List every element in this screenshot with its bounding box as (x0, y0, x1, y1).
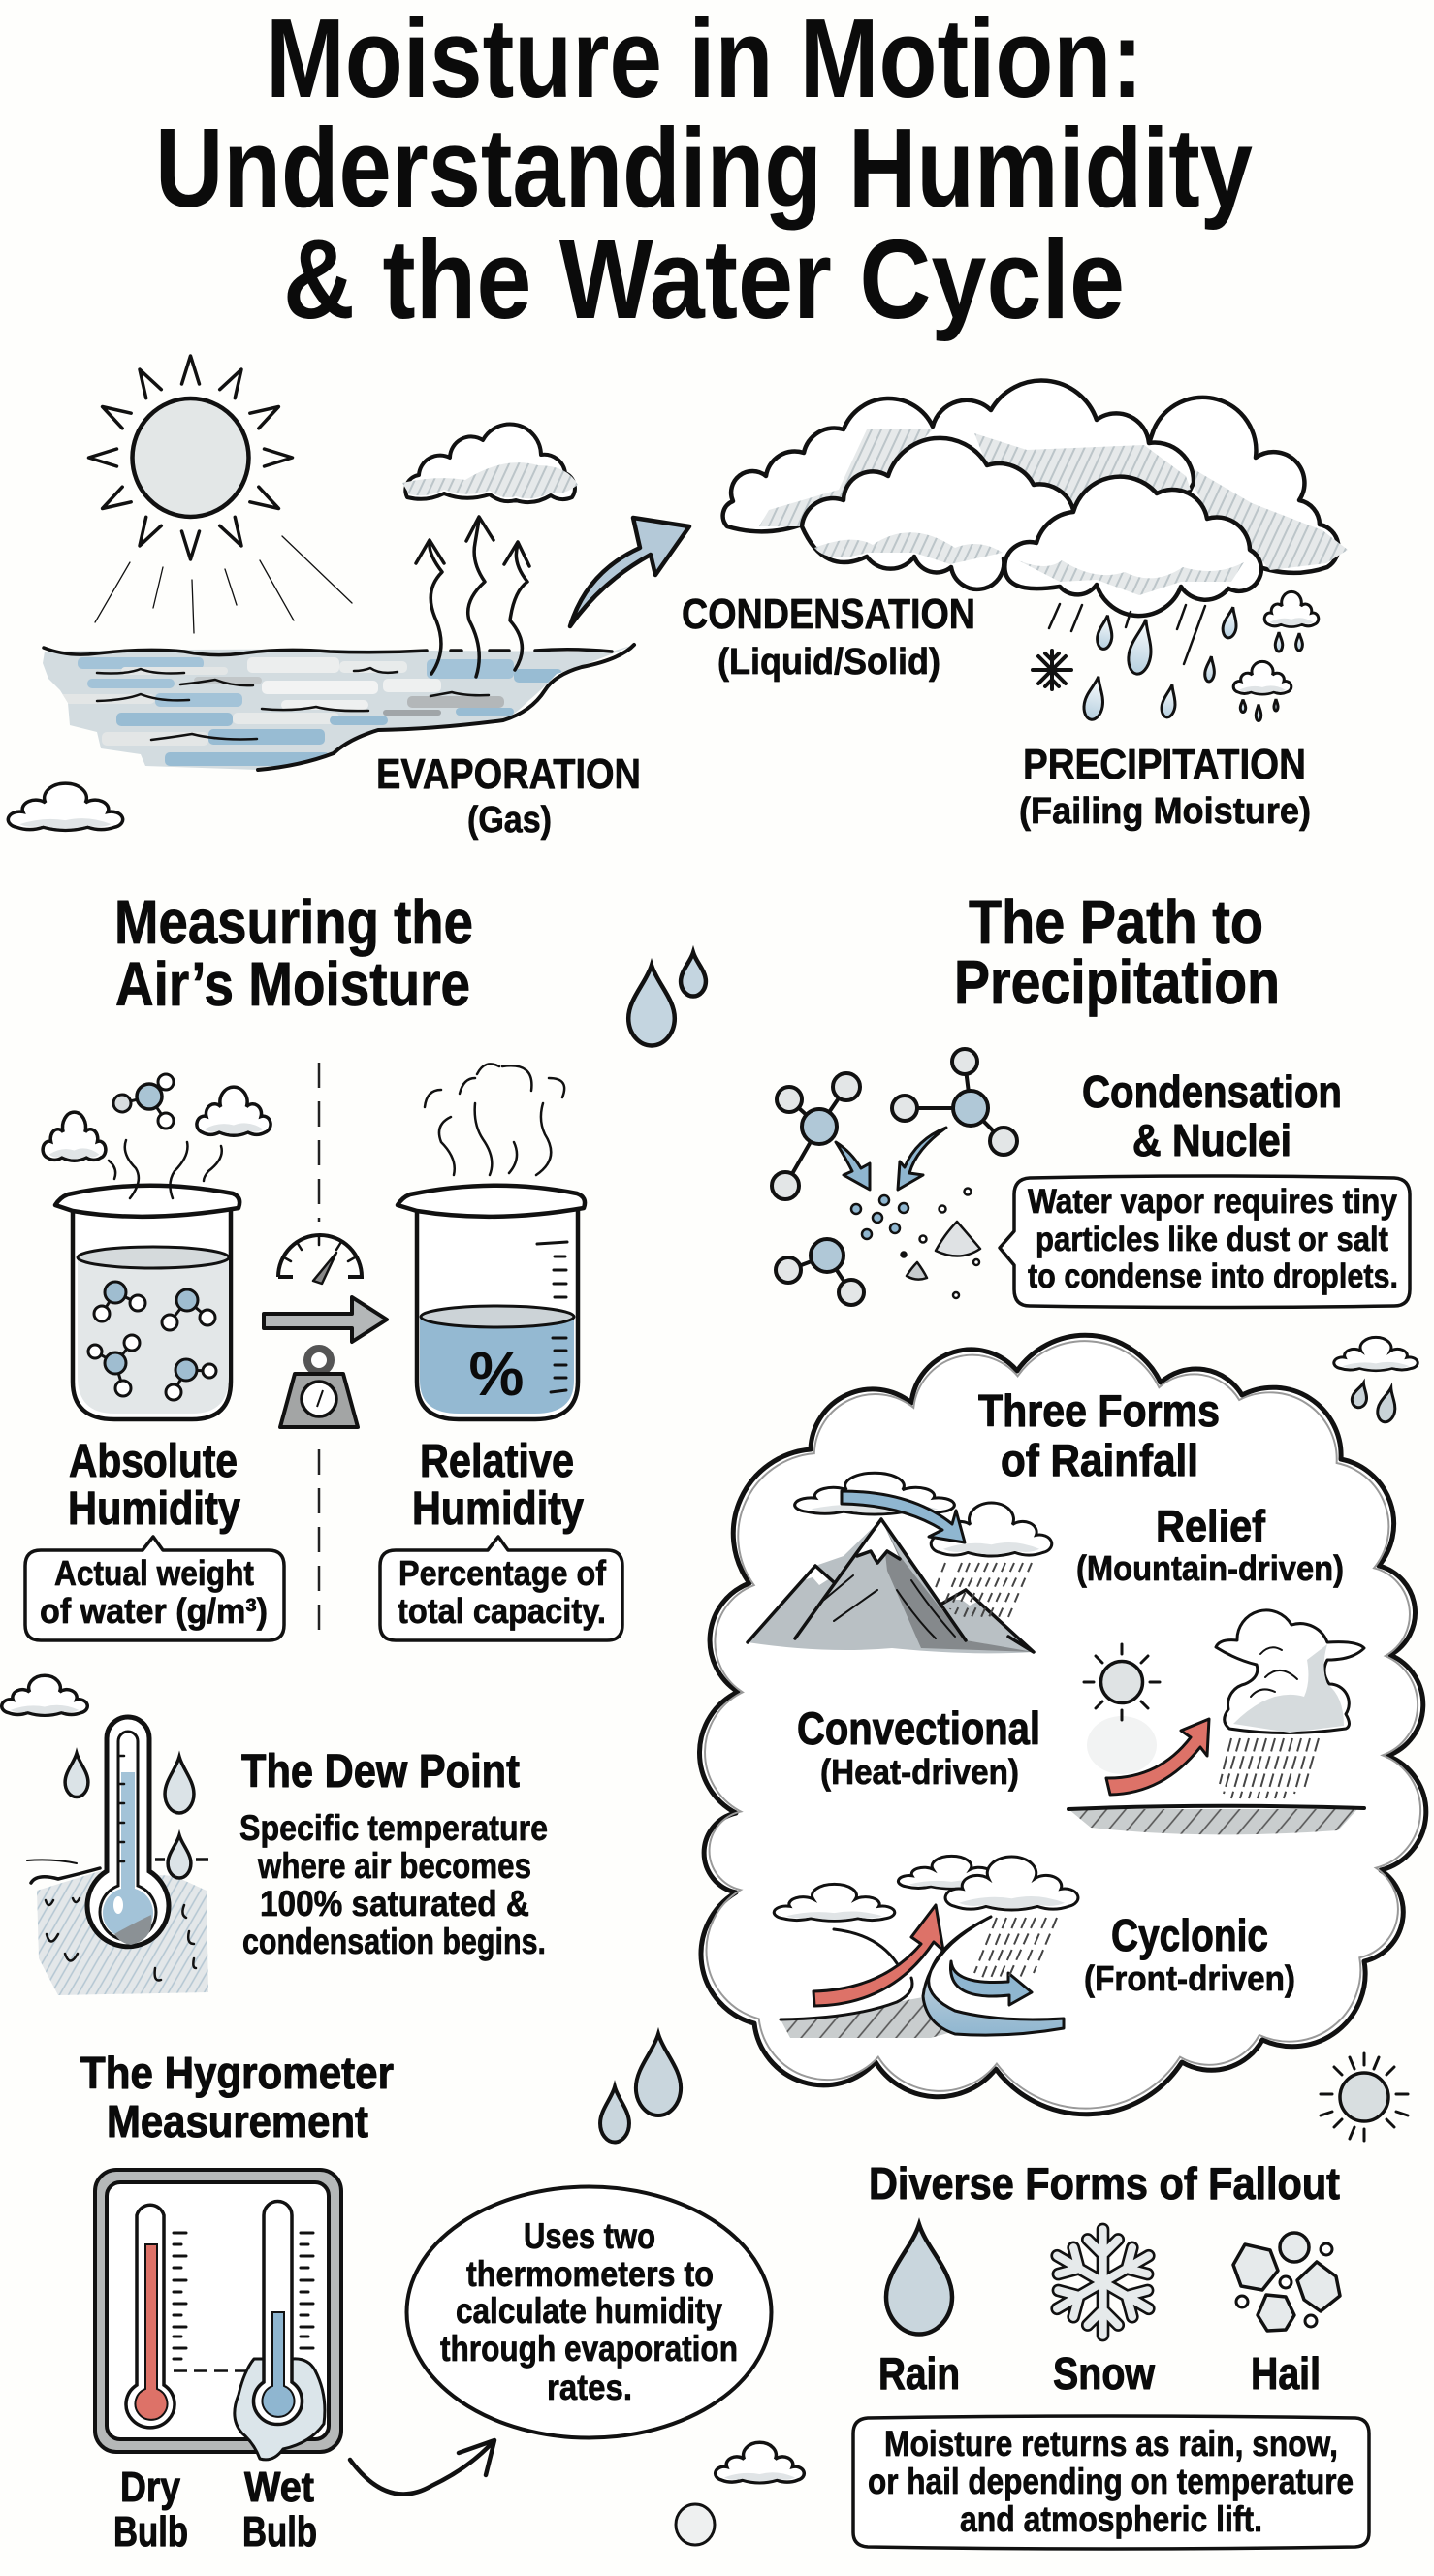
heading: path to precipitation (954, 887, 1280, 1017)
label: absolute humidity (68, 1436, 240, 1535)
icon: relative humidity beaker (398, 1064, 585, 1419)
icon: thermometer (87, 1717, 169, 1947)
heading: path to precipitation: The Path to (969, 887, 1263, 957)
panel: dew point (2, 1675, 548, 1995)
divider (318, 1063, 320, 1640)
icon: sun bottom right (1321, 2053, 1408, 2141)
icon: snowflake (1049, 2229, 1157, 2336)
heading: three forms (978, 1385, 1220, 1485)
icon: relative humidity beaker: % (469, 1339, 524, 1409)
icon: decorative cloud (8, 783, 123, 830)
title (155, 0, 1253, 342)
heading: measuring: Air’s Moisture (115, 949, 470, 1019)
label: absolute humidity: Absolute (69, 1436, 238, 1487)
callout: hygrometer explanation: thermometers to (466, 2254, 714, 2294)
heading: three forms: of Rainfall (1001, 1435, 1198, 1485)
label: condensation (682, 590, 975, 683)
label: convectional: Convectional (797, 1702, 1040, 1754)
label: condensation: CONDENSATION (682, 590, 975, 638)
text: dew point: condensation begins. (242, 1922, 546, 1961)
label: dry bulb: Dry (120, 2464, 180, 2511)
heading: hygrometer (80, 2048, 394, 2147)
icon: relief rainfall (748, 1473, 1052, 1653)
icon: sun (89, 356, 352, 633)
label: relative humidity: Humidity (412, 1483, 584, 1535)
arrow: rising vapour (416, 517, 529, 677)
label: wet bulb: Wet (244, 2464, 314, 2511)
label: condensation: (Liquid/Solid) (717, 642, 940, 683)
title: Understanding Humidity (155, 105, 1253, 231)
label: cyclonic: Cyclonic (1111, 1910, 1268, 1960)
icon: cyclonic rainfall (774, 1856, 1078, 2038)
label: relief (1076, 1501, 1344, 1588)
icon: gauge (278, 1235, 362, 1284)
icon: absolute humidity beaker (55, 1186, 239, 1419)
label: condensation nuclei: & Nuclei (1132, 1115, 1291, 1165)
panel: three forms of rainfall (700, 1335, 1426, 2115)
callout: nuclei: particles like dust or salt (1036, 1221, 1388, 1258)
icon: raincloud top right (1334, 1337, 1418, 1423)
icon: small cloud (402, 424, 578, 502)
icon: molecules (772, 1049, 1017, 1305)
label: wet bulb: Bulb (242, 2508, 317, 2556)
label: absolute humidity: Humidity (68, 1483, 240, 1535)
arrow: to explanation (350, 2440, 494, 2495)
arrow: to condensation (570, 518, 689, 626)
icon: dry bulb thermometer (126, 2205, 175, 2428)
label: precipitation: (Failing Moisture) (1019, 791, 1311, 832)
text: dew point: The Dew Point (241, 1746, 520, 1797)
heading: three forms: Three Forms (978, 1385, 1220, 1436)
callout: nuclei (1000, 1176, 1410, 1307)
callout: fallout summary: Moisture returns as rain, snow, (884, 2424, 1338, 2464)
icon: convectional rainfall (1068, 1610, 1364, 1834)
text: dew point: where air becomes (257, 1846, 531, 1886)
panel: water cycle (8, 356, 1348, 841)
icon: rain drop (886, 2224, 952, 2335)
callout: relative (380, 1537, 622, 1640)
panel: hygrometer (80, 2034, 772, 2556)
arrow: absolute to relative (264, 1297, 387, 1342)
label: evaporation (376, 750, 641, 841)
callout: fallout summary: or hail depending on temperature (868, 2462, 1354, 2501)
callout: relative: total capacity. (398, 1591, 606, 1631)
heading: path to precipitation: Precipitation (954, 947, 1280, 1017)
icon: hygrometer frame (95, 2170, 341, 2452)
callout: nuclei: Water vapor requires tiny (1028, 1183, 1397, 1221)
icon: decorative cloud and pebble (676, 2442, 804, 2545)
icon: dew drops (65, 1753, 208, 1878)
icon: storm clouds (723, 380, 1348, 616)
icon: dust particles (851, 1189, 980, 1298)
label: evaporation: (Gas) (467, 800, 552, 841)
label: cyclonic: (Front-driven) (1084, 1958, 1295, 1998)
heading: measuring (114, 887, 473, 1019)
callout: hygrometer explanation (407, 2187, 772, 2437)
label: dry bulb (113, 2464, 188, 2556)
label: relief: (Mountain-driven) (1076, 1548, 1344, 1588)
label: precipitation (1019, 741, 1311, 832)
label: relative humidity (412, 1436, 584, 1535)
labels: rain snow hail: Hail (1251, 2348, 1321, 2399)
callout: relative: Percentage of (398, 1553, 607, 1593)
label: precipitation: PRECIPITATION (1023, 741, 1306, 788)
callout: absolute: Actual weight (54, 1553, 254, 1593)
label: relative humidity: Relative (420, 1436, 574, 1487)
icon: wet bulb thermometer (235, 2201, 325, 2460)
heading: fallout: Diverse Forms of Fallout (869, 2158, 1340, 2209)
icon: vapour above beaker (43, 1074, 271, 1198)
icon: hail (1233, 2233, 1340, 2331)
icon: falling drops (600, 2034, 681, 2143)
label: evaporation: EVAPORATION (376, 750, 641, 798)
label: cyclonic (1084, 1910, 1295, 1998)
icon: central drops (628, 952, 706, 1045)
callout: fallout summary (853, 2416, 1369, 2549)
labels: rain snow hail (878, 2348, 1321, 2399)
callout: hygrometer explanation: Uses two (524, 2216, 655, 2256)
label: dry bulb: Bulb (113, 2508, 188, 2556)
callout: hygrometer explanation: rates. (547, 2368, 632, 2407)
text: dew point (239, 1746, 548, 1961)
label: wet bulb (242, 2464, 317, 2556)
callout: absolute: of water (g/m³) (40, 1591, 268, 1631)
icon: water body (39, 640, 640, 776)
arrows: to nuclei (836, 1128, 946, 1190)
heading: measuring: Measuring the (114, 887, 473, 957)
callout: fallout summary: and atmospheric lift. (960, 2499, 1262, 2539)
label: condensation nuclei (1082, 1066, 1342, 1165)
title: & the Water Cycle (283, 216, 1125, 342)
label: convectional: (Heat-driven) (820, 1752, 1019, 1792)
icon: decorative cloud (2, 1675, 87, 1715)
label: condensation nuclei: Condensation (1082, 1066, 1342, 1117)
heading: hygrometer: Measurement (107, 2096, 368, 2147)
callout: hygrometer explanation: through evaporation (440, 2329, 738, 2369)
icon: dew ground (27, 1860, 208, 1995)
callout: absolute (25, 1537, 284, 1640)
labels: rain snow hail: Snow (1053, 2348, 1155, 2399)
callout: hygrometer explanation: calculate humidity (456, 2291, 722, 2331)
label: relief: Relief (1156, 1501, 1266, 1551)
cloud frame (700, 1335, 1426, 2115)
panel: diverse forms of fallout (853, 2158, 1369, 2549)
panel: measuring humidity (25, 1063, 622, 1640)
text: dew point: 100% saturated & (260, 1884, 529, 1924)
panel: condensation and nuclei (772, 1049, 1410, 1307)
icon: weight (280, 1349, 358, 1427)
heading: hygrometer: The Hygrometer (80, 2048, 394, 2098)
icon: precipitation (1033, 591, 1319, 721)
label: convectional (797, 1702, 1040, 1792)
text: dew point: Specific temperature (239, 1808, 548, 1848)
labels: rain snow hail: Rain (878, 2348, 960, 2399)
